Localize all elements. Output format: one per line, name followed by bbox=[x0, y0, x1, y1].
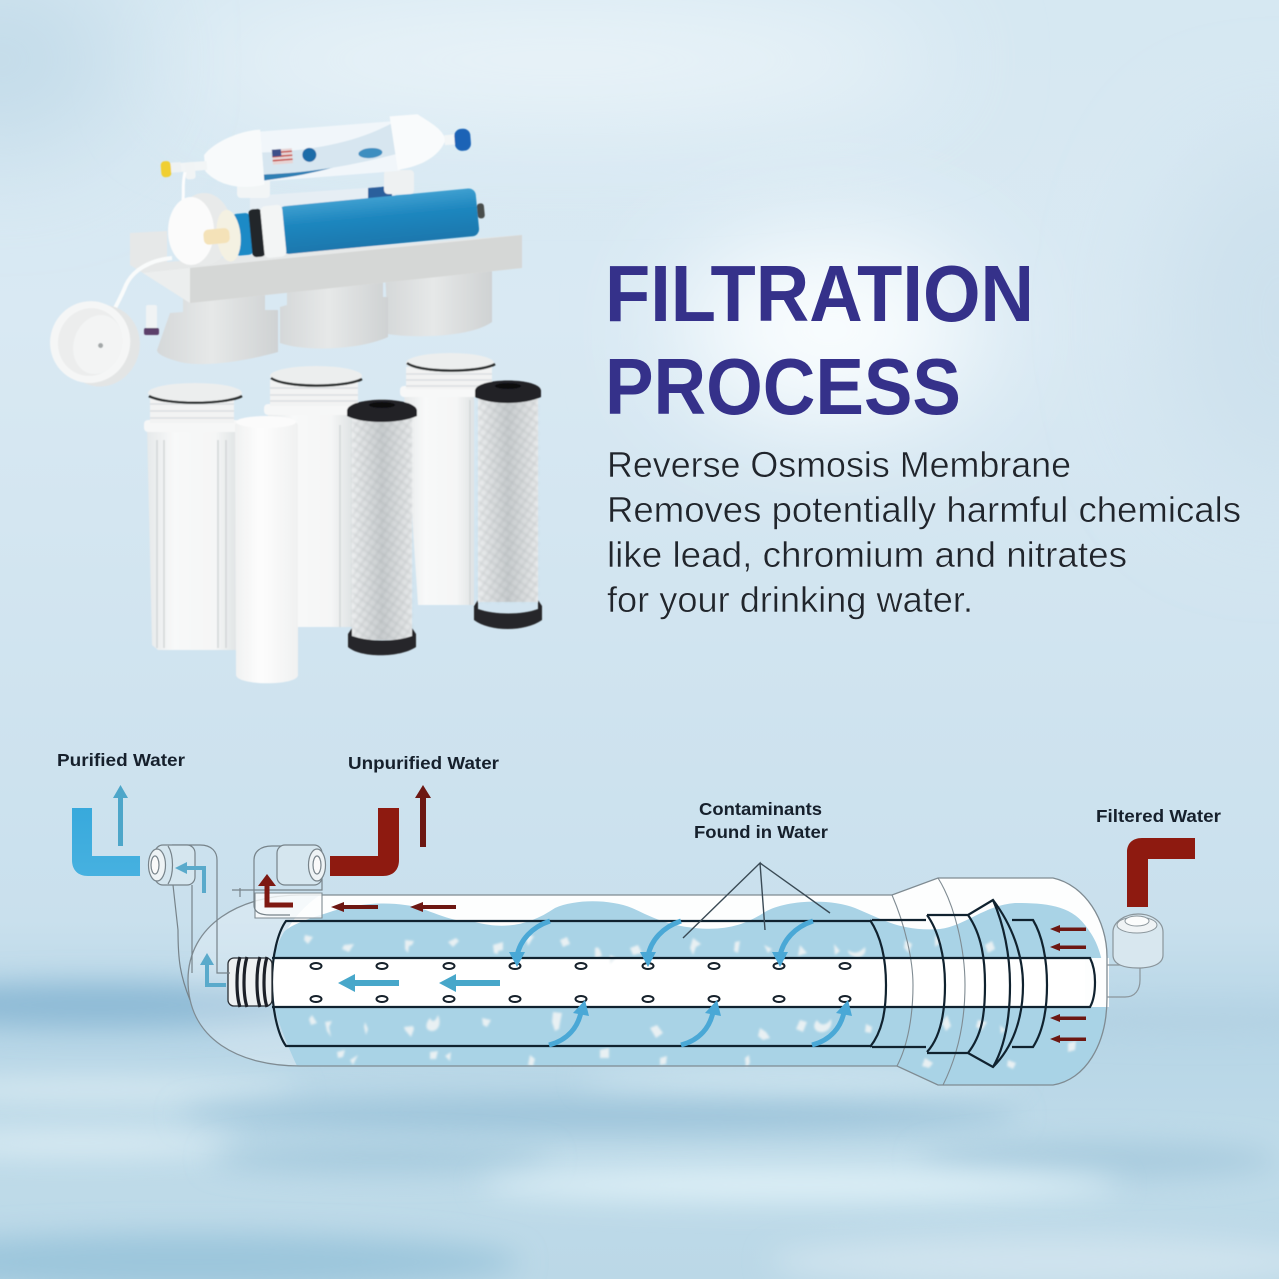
label: filtered water with red elbow bbox=[1096, 806, 1221, 907]
housing outline bbox=[188, 878, 1107, 1085]
carbon filter 2 bbox=[474, 380, 542, 629]
label: contaminants found in water: Found in Water bbox=[694, 822, 828, 842]
membrane tube lines bbox=[272, 900, 1095, 1067]
label: contaminants found in water: Contaminants bbox=[699, 799, 822, 819]
outer housing bbox=[188, 878, 1107, 1085]
description text: like lead, chromium and nitrates bbox=[607, 534, 1127, 575]
valve bbox=[144, 305, 159, 335]
label: unpurified water with red elbow and arrow: Unpurified Water bbox=[348, 753, 499, 773]
open cup bbox=[168, 193, 232, 265]
concentrate channel bbox=[255, 893, 322, 918]
right red inflow arrows bbox=[1050, 925, 1086, 1043]
blue membrane bbox=[201, 185, 487, 264]
second cartridge behind membrane bbox=[250, 186, 395, 222]
right outlet fitting: concentrate bbox=[232, 845, 326, 915]
perforation holes bbox=[310, 963, 850, 1002]
three filter heads bbox=[157, 270, 492, 364]
tubing bbox=[114, 258, 172, 310]
straight blue arrows in core tube bbox=[338, 974, 500, 992]
threaded cap bbox=[39, 291, 150, 397]
label: purified water with blue elbow and arrow: Purified Water bbox=[57, 750, 185, 770]
inner tube bbox=[272, 958, 1095, 1007]
callout lines: contaminants bbox=[683, 863, 830, 938]
product photo: RO filter system bbox=[39, 110, 542, 683]
title: FILTRATION bbox=[605, 249, 1034, 338]
left outlet fitting: purified bbox=[148, 845, 230, 1000]
description text: Removes potentially harmful chemicals bbox=[607, 489, 1241, 530]
mounting plate bbox=[130, 231, 522, 303]
title bbox=[605, 249, 1034, 431]
housing 2 bbox=[264, 366, 364, 627]
title: PROCESS bbox=[605, 342, 961, 431]
label: filtered water with red elbow: Filtered Water bbox=[1096, 806, 1221, 826]
housing 3 bbox=[400, 353, 495, 605]
description text: Reverse Osmosis Membrane bbox=[607, 444, 1071, 485]
top red flow arrows bbox=[331, 902, 456, 912]
label: purified water with blue elbow and arrow bbox=[57, 750, 185, 876]
water bbox=[272, 901, 1110, 1090]
membrane diagram bbox=[148, 845, 1163, 1090]
label: unpurified water with red elbow and arrow bbox=[330, 753, 499, 876]
description text: for your drinking water. bbox=[607, 579, 973, 620]
label: contaminants found in water bbox=[694, 799, 828, 842]
top inline cartridge bbox=[158, 110, 473, 194]
end connector with o-rings bbox=[228, 957, 272, 1007]
inner red flow L arrow bbox=[258, 874, 293, 905]
inner blue flow L arrows bbox=[180, 868, 226, 985]
carbon filter 1 bbox=[347, 400, 417, 655]
description text bbox=[607, 444, 1241, 620]
curved blue flow arrows bbox=[509, 921, 852, 1045]
contaminants bbox=[304, 935, 1076, 1069]
right inlet fitting bbox=[1107, 914, 1163, 997]
cartridge brackets bbox=[237, 172, 270, 198]
housing 1 bbox=[144, 383, 242, 650]
white sediment filter bbox=[235, 416, 298, 683]
